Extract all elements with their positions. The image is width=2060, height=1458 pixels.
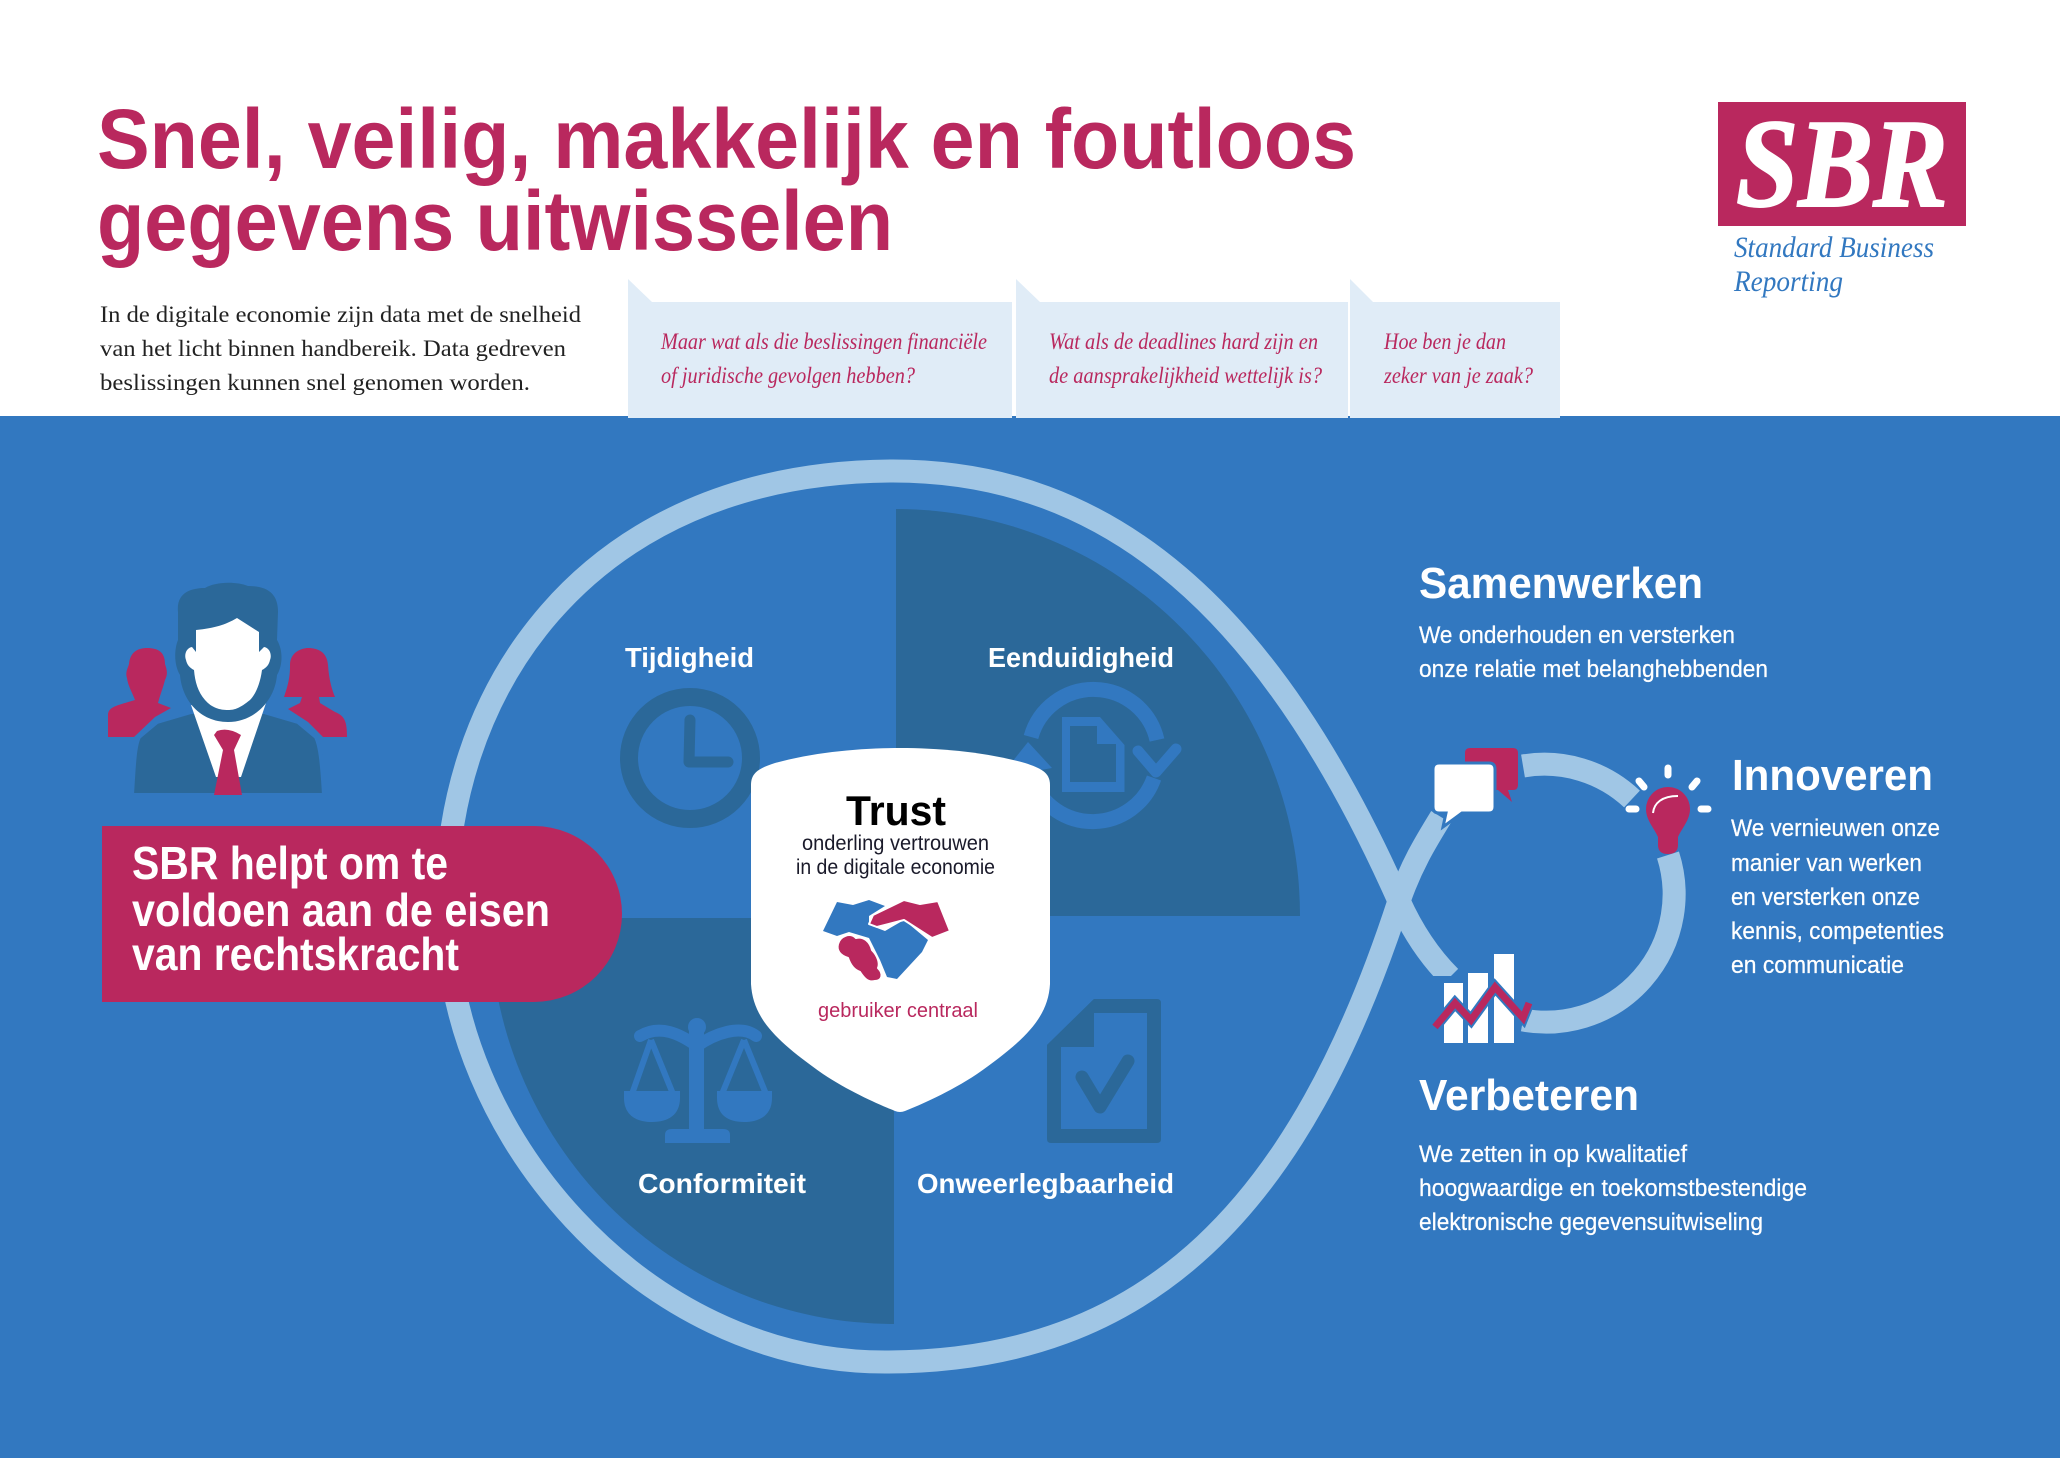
text block: Innoveren — [1731, 751, 1944, 979]
icon: light bulb — [1629, 768, 1708, 854]
text block: Verbeteren — [1419, 1071, 1807, 1236]
icon: female colleague — [284, 648, 347, 737]
text block: Innoveren: manier van werken — [1731, 850, 1922, 877]
icon: male colleague — [108, 648, 171, 737]
callout: certainty question: zeker van je zaak? — [1383, 363, 1533, 388]
blue background panel — [0, 416, 2060, 1458]
text block: Verbeteren: We zetten in op kwalitatief — [1419, 1141, 1687, 1168]
intro text: beslissingen kunnen snel genomen worden. — [100, 370, 530, 395]
callout: certainty question — [1350, 279, 1560, 418]
shield: trust: Trust — [846, 787, 946, 834]
quadrant: Conformiteit dark panel — [490, 918, 894, 1324]
text block: Innoveren: en versterken onze — [1731, 884, 1920, 911]
callout: deadlines question — [1016, 279, 1348, 418]
callout: certainty question: Hoe ben je dan — [1383, 329, 1506, 354]
icon: manager shirt — [191, 703, 266, 777]
text block: Innoveren: kennis, competenties — [1731, 918, 1944, 945]
SBR logo: SBR — [1736, 95, 1948, 234]
icon: manager suit — [132, 712, 324, 795]
shield: trust: onderling vertrouwen — [802, 832, 989, 855]
title: gegevens uitwisselen — [97, 174, 893, 268]
callout pill: SBR helps — [102, 826, 622, 1002]
icon: manager hair — [175, 583, 282, 722]
callout pill: SBR helps: voldoen aan de eisen — [132, 884, 550, 936]
icon: manager tie — [214, 730, 242, 795]
quadrant: Eenduidigheid dark panel — [896, 509, 1300, 916]
SBR logo — [1718, 95, 1966, 298]
icon: manager face — [185, 618, 271, 710]
icon: handshake — [823, 900, 950, 981]
text block: Innoveren: en communicatie — [1731, 952, 1904, 979]
text block: Samenwerken: Samenwerken — [1419, 559, 1703, 608]
shield: trust: in de digitale economie — [796, 856, 995, 879]
icon: clock — [629, 697, 751, 819]
callout: deadlines question: Wat als de deadlines hard zijn en — [1049, 329, 1318, 354]
callout: deadlines question: de aansprakelijkheid wettelijk is? — [1049, 363, 1322, 388]
quadrant labels: Conformiteit — [638, 1168, 806, 1199]
title: Snel, veilig, makkelijk en foutloos — [97, 92, 1356, 186]
icon: checked document — [1047, 999, 1161, 1143]
quadrant labels: Onweerlegbaarheid — [917, 1168, 1174, 1199]
quadrant labels: Eenduidigheid — [988, 642, 1174, 673]
quadrant labels — [625, 642, 1174, 1199]
text block: Verbeteren: hoogwaardige en toekomstbestendige — [1419, 1175, 1807, 1202]
icon: rising bar chart — [1420, 954, 1529, 1043]
title — [97, 92, 1356, 268]
icon: people group — [108, 583, 347, 795]
SBR logo: Standard Business — [1734, 231, 1934, 264]
text block: Innoveren: We vernieuwen onze — [1731, 815, 1940, 842]
callout pill: SBR helps: SBR helpt om te — [132, 837, 448, 889]
shield: trust: gebruiker centraal — [818, 1000, 978, 1022]
callout: financial question: of juridische gevolgen hebben? — [661, 363, 915, 388]
icon: document cycle — [1012, 689, 1176, 822]
text block: Innoveren: Innoveren — [1732, 751, 1933, 800]
text block: Verbeteren: elektronische gegevensuitwiseling — [1419, 1209, 1763, 1236]
icon: scales of justice — [624, 1018, 772, 1143]
infinity loop band — [447, 471, 1674, 1362]
intro text — [100, 302, 582, 395]
text block: Samenwerken — [1419, 559, 1768, 683]
text block: Samenwerken: onze relatie met belanghebbenden — [1419, 656, 1768, 683]
text block: Samenwerken: We onderhouden en versterken — [1419, 622, 1735, 649]
callout: financial question: Maar wat als die beslissingen financiële — [660, 329, 987, 354]
quadrant labels: Tijdigheid — [625, 642, 754, 673]
text block: Verbeteren: Verbeteren — [1419, 1071, 1639, 1120]
SBR logo: Reporting — [1733, 265, 1843, 298]
callout pill: SBR helps: van rechtskracht — [132, 928, 459, 980]
icon: speech bubbles — [1433, 748, 1518, 827]
shield: trust — [751, 748, 1050, 1112]
intro text: van het licht binnen handbereik. Data gedreven — [100, 336, 567, 361]
intro text: In de digitale economie zijn data met de snelheid — [100, 302, 582, 327]
callout: financial question — [628, 279, 1012, 418]
